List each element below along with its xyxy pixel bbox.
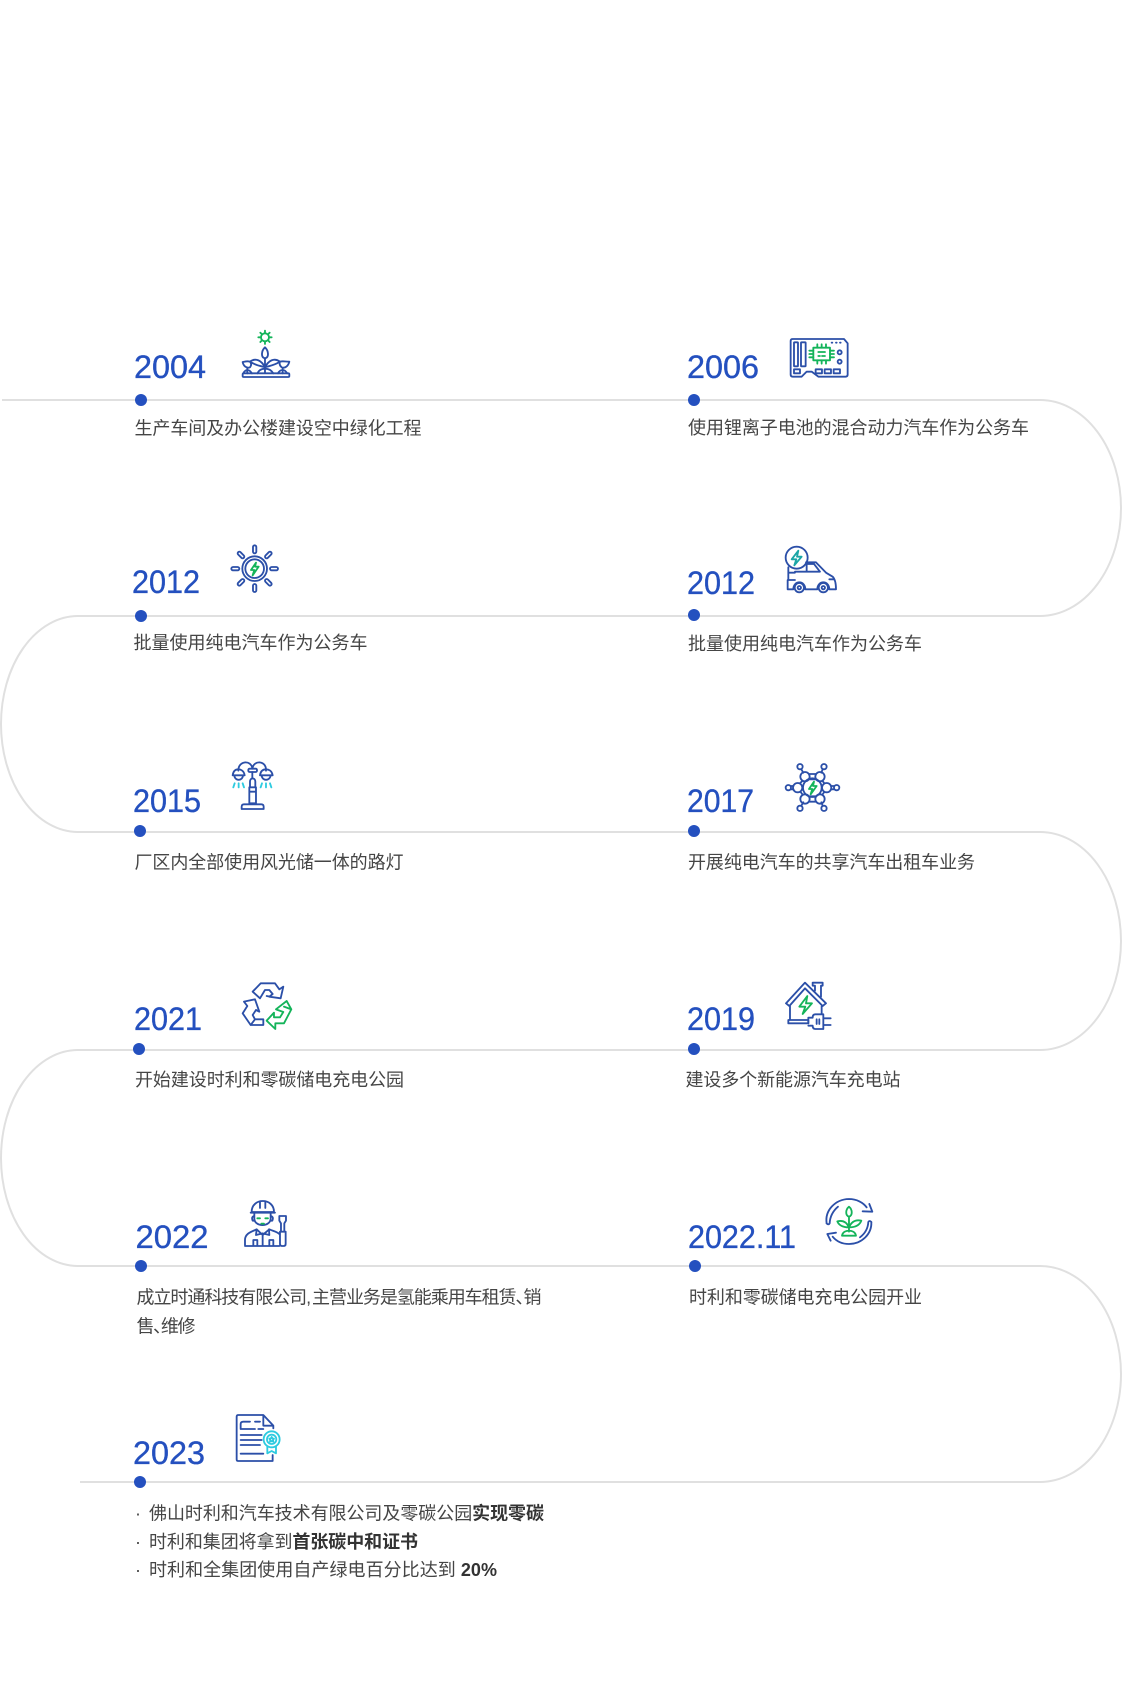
milestone: 2023 bbox=[133, 1415, 544, 1580]
year: 2021 bbox=[134, 1001, 202, 1037]
year: 2022 bbox=[136, 1219, 208, 1255]
description: 建设多个新能源汽车充电站 bbox=[686, 1070, 900, 1090]
description: 批量使用纯电汽车作为公务车 bbox=[688, 634, 922, 654]
description: 售、维修 bbox=[136, 1316, 196, 1336]
year: 2004 bbox=[134, 349, 206, 385]
year: 2019 bbox=[687, 1001, 755, 1037]
bullet list: 佛山时利和汽车技术有限公司及零碳公园实现零碳 bbox=[149, 1502, 544, 1524]
serpentine timeline path bbox=[1, 400, 1121, 1482]
icon: energy network bbox=[786, 764, 839, 811]
milestone: 2021 bbox=[133, 983, 404, 1090]
marker dot bbox=[688, 1043, 700, 1055]
icon: house with plug bbox=[786, 983, 831, 1029]
description: 开始建设时利和零碳储电充电公园 bbox=[135, 1070, 404, 1090]
icon: worker with tool bbox=[245, 1201, 286, 1246]
icon: solar sun with bolt bbox=[231, 545, 278, 592]
marker dot bbox=[134, 1476, 146, 1488]
milestone: 2022 bbox=[135, 1201, 542, 1336]
milestone: 2006 bbox=[687, 339, 1029, 438]
marker dot bbox=[135, 610, 147, 622]
bullet list: · bbox=[135, 1532, 141, 1552]
milestone: 2017 bbox=[687, 764, 975, 872]
description: 生产车间及办公楼建设空中绿化工程 bbox=[134, 418, 422, 438]
description: 使用锂离子电池的混合动力汽车作为公务车 bbox=[688, 418, 1029, 438]
description: 批量使用纯电汽车作为公务车 bbox=[134, 633, 368, 653]
milestone: 2019 bbox=[686, 983, 900, 1090]
icon: recycling arrows bbox=[243, 983, 291, 1029]
year: 2012 bbox=[132, 564, 200, 600]
bullet list: 时利和集团将拿到首张碳中和证书 bbox=[149, 1531, 418, 1552]
marker dot bbox=[688, 394, 700, 406]
year: 2017 bbox=[687, 783, 754, 819]
description: 时利和零碳储电充电公园开业 bbox=[689, 1288, 922, 1308]
marker dot bbox=[689, 1260, 701, 1272]
milestone: 2015 bbox=[133, 762, 404, 872]
milestone: 2022.11 bbox=[688, 1199, 922, 1308]
marker dot bbox=[688, 609, 700, 621]
year: 2015 bbox=[133, 783, 201, 819]
description: 开展纯电汽车的共享汽车出租车业务 bbox=[688, 852, 975, 872]
marker dot bbox=[133, 1043, 145, 1055]
milestone: 2012 right bbox=[687, 547, 922, 654]
icon: circuit board bbox=[791, 339, 848, 377]
year: 2012 bbox=[687, 565, 755, 601]
icon: electric car bbox=[786, 547, 836, 592]
description: 厂区内全部使用风光储一体的路灯 bbox=[134, 852, 404, 872]
description bbox=[136, 1288, 542, 1336]
icon: plant in cycle arrows bbox=[826, 1199, 872, 1244]
bullet list: 时利和全集团使用自产绿电百分比达到 20% bbox=[149, 1560, 497, 1580]
icon: street lamp bbox=[233, 762, 273, 809]
bullet list: · bbox=[135, 1560, 141, 1580]
milestone: 2004 bbox=[134, 331, 422, 438]
icon: certificate document bbox=[237, 1415, 280, 1461]
year: 2023 bbox=[133, 1435, 205, 1471]
bullet list bbox=[135, 1502, 544, 1580]
milestone: 2012 left bbox=[132, 545, 368, 653]
marker dot bbox=[688, 825, 700, 837]
year: 2022.11 bbox=[688, 1219, 796, 1255]
marker dot bbox=[134, 825, 146, 837]
bullet list: · bbox=[135, 1504, 141, 1524]
marker dot bbox=[135, 1260, 147, 1272]
description: 成立时通科技有限公司,主营业务是氢能乘用车租赁、销 bbox=[136, 1288, 542, 1308]
year: 2006 bbox=[687, 349, 759, 385]
marker dot bbox=[135, 394, 147, 406]
icon: sprout and sun bbox=[243, 331, 289, 377]
